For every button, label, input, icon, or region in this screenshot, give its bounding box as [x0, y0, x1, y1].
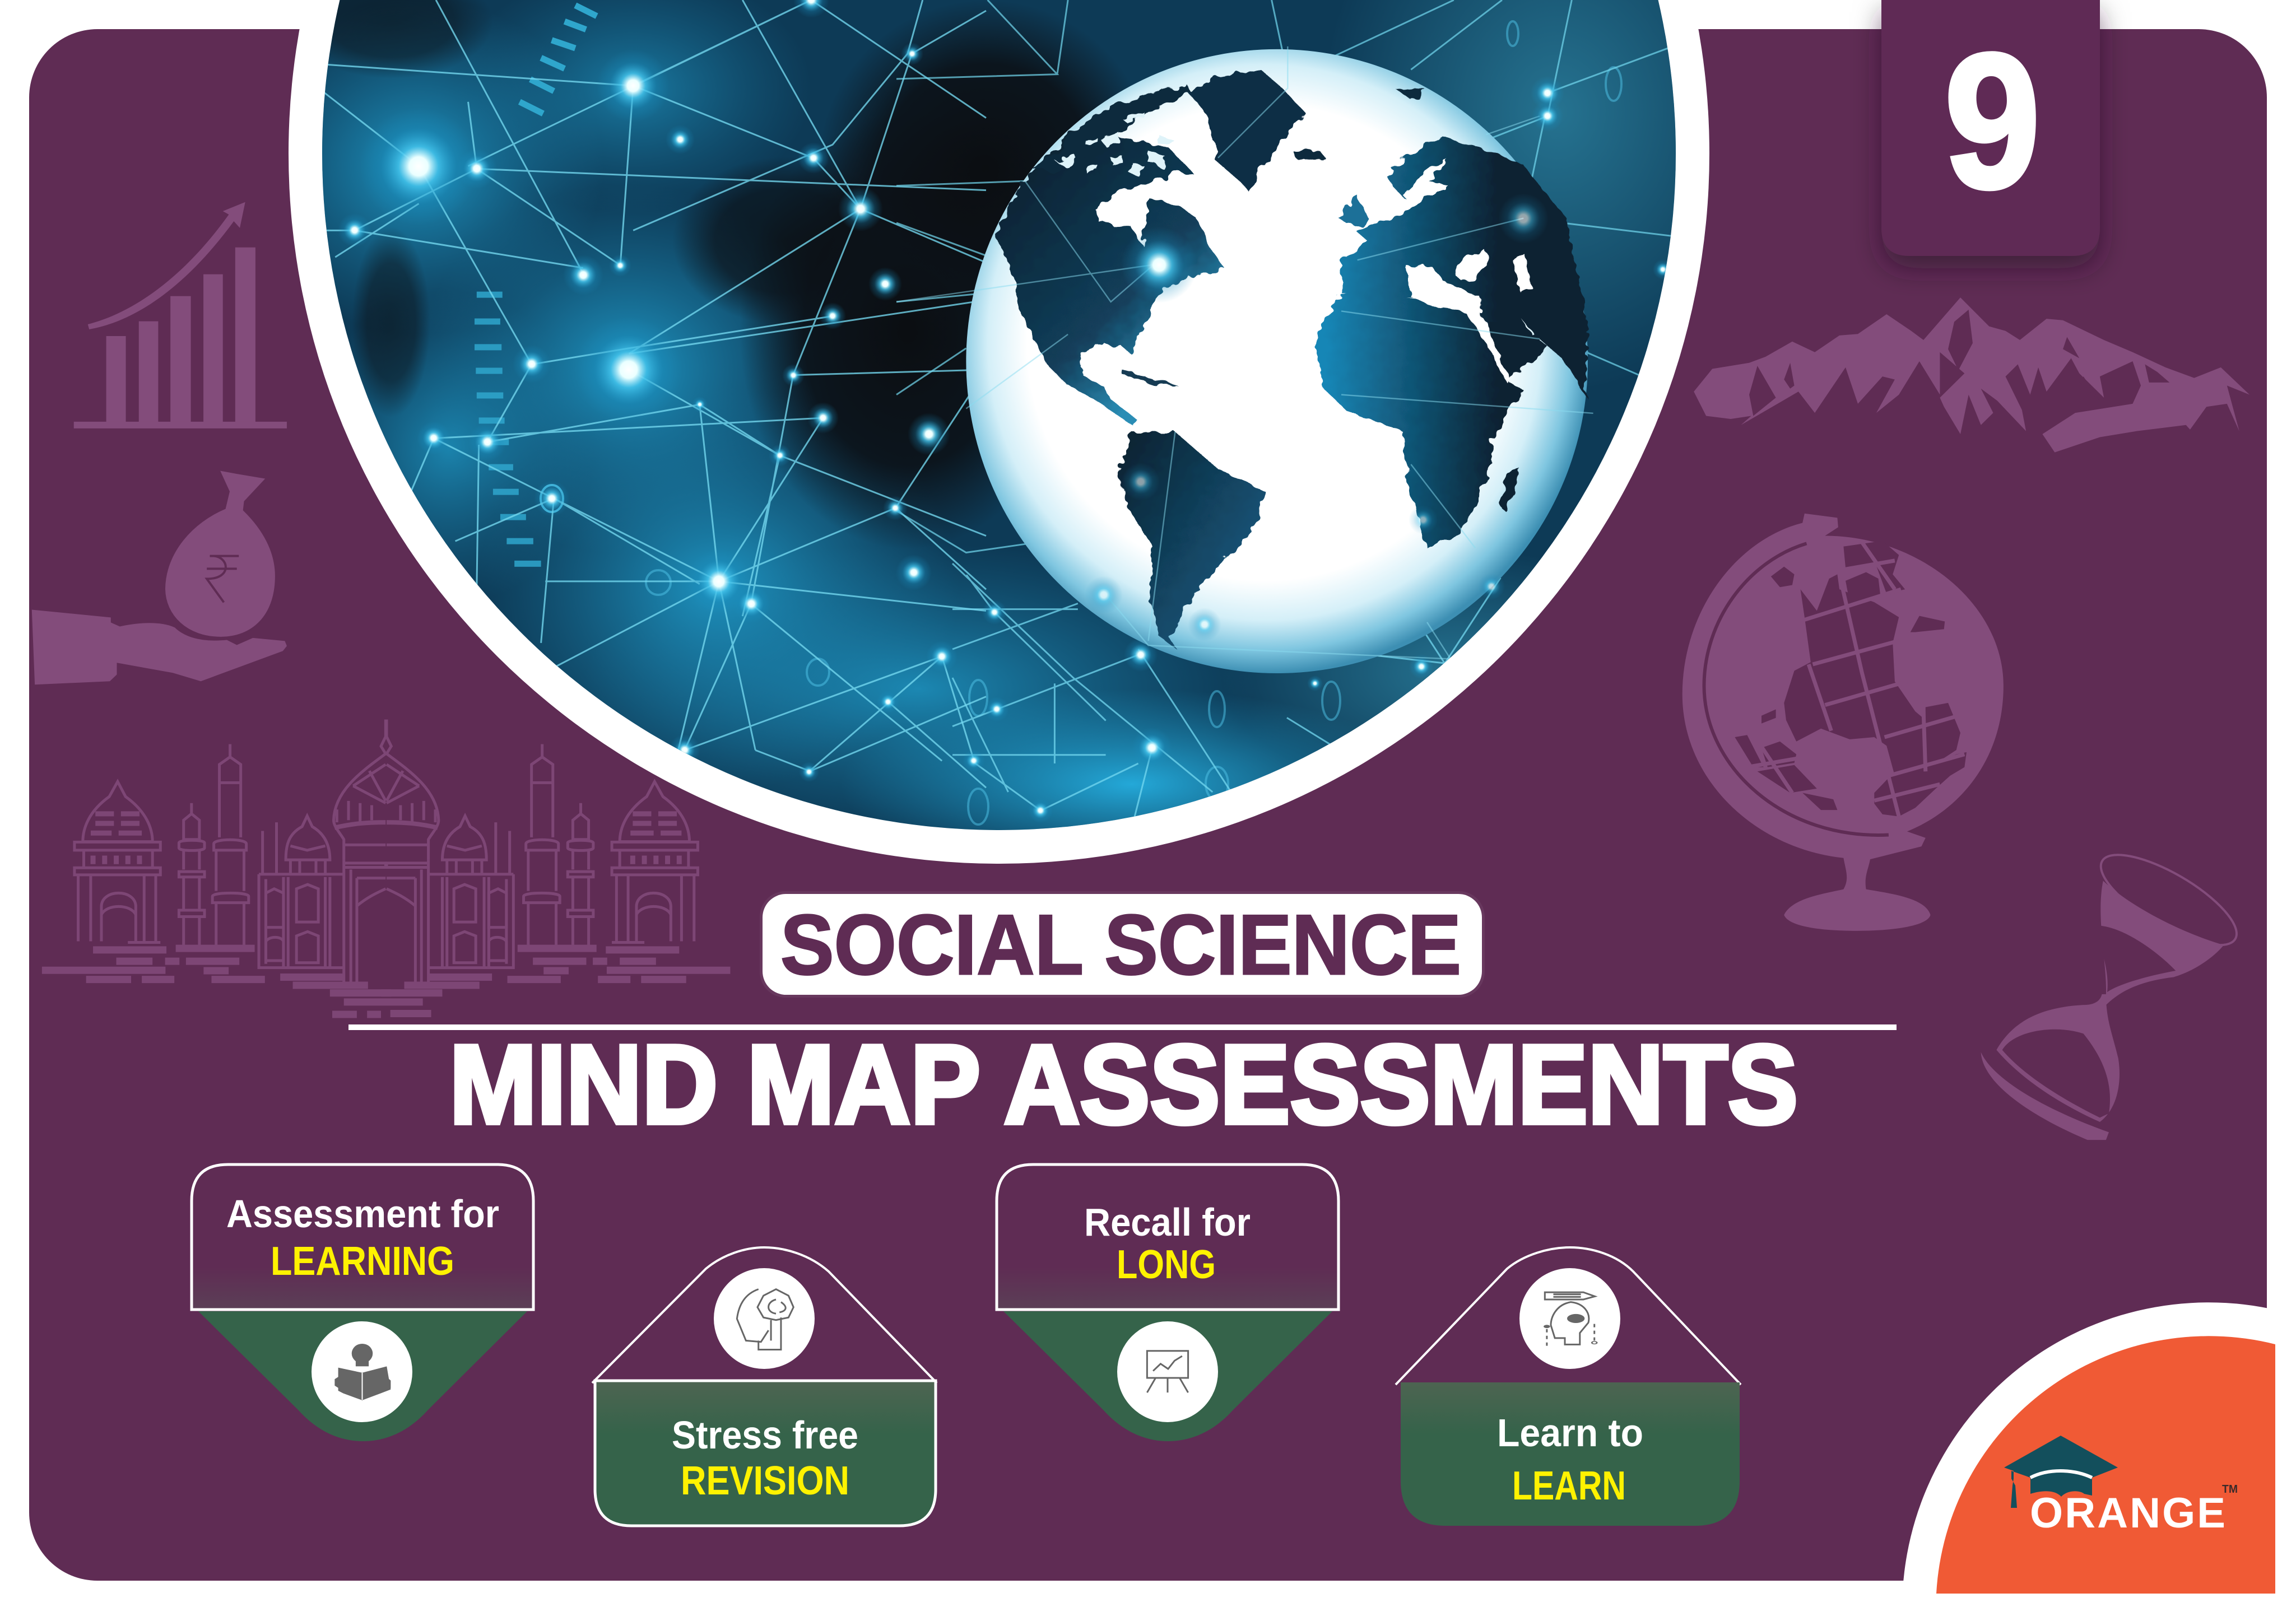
binary rings	[541, 21, 1621, 825]
grade number: 9	[1944, 13, 2041, 228]
card keyword: REVISION	[681, 1459, 849, 1503]
trademark mark: TM	[2222, 1483, 2238, 1496]
logo: graduation cap	[2004, 1436, 2118, 1508]
card keyword: LONG	[1117, 1242, 1216, 1287]
iceland	[1293, 88, 1427, 162]
card heading: Assessment for	[226, 1192, 499, 1236]
globe glints	[1085, 76, 1564, 641]
network lines over globe	[896, 46, 1593, 664]
hero image: network and earth	[322, 0, 1676, 830]
earth globe	[966, 49, 1588, 673]
continents	[996, 69, 1588, 648]
glowing nodes	[338, 0, 1673, 823]
white ring around hero	[289, 0, 1709, 864]
icon: presentation board	[1117, 1321, 1218, 1422]
network lines left	[322, 0, 986, 788]
icon: hourglass	[1981, 838, 2248, 1140]
madagascar	[1499, 467, 1518, 511]
icon: head with gear	[714, 1268, 815, 1369]
icon: mountains	[1694, 297, 2249, 453]
icon: desk globe	[1683, 514, 2004, 931]
icon: taj mahal line art	[42, 719, 730, 1014]
orange corner with logo	[1902, 1302, 2296, 1607]
card heading: Stress free	[672, 1413, 858, 1457]
card heading: Recall for	[1084, 1200, 1251, 1244]
main title: MIND MAP ASSESSMENTS	[449, 1022, 1798, 1147]
subject title: SOCIAL SCIENCE	[780, 897, 1461, 993]
gear dashes	[475, 6, 597, 563]
arctic islands	[1030, 83, 1191, 172]
greenland	[1188, 69, 1307, 193]
uk	[1338, 195, 1368, 227]
north america	[996, 125, 1224, 425]
card: assessment for learning	[192, 1165, 533, 1441]
card: stress free revision	[592, 1247, 937, 1526]
card: learn to learn	[1396, 1247, 1741, 1526]
network lines right bottom	[952, 563, 1500, 821]
south america	[1119, 432, 1266, 648]
africa	[1317, 294, 1523, 548]
icon: money bag on hand	[32, 470, 287, 684]
seas	[1403, 160, 1532, 381]
grade tab	[1881, 0, 2100, 256]
card: recall for long	[997, 1165, 1338, 1441]
icon: growth bar chart	[74, 202, 287, 428]
card keyword: LEARN	[1512, 1464, 1626, 1508]
card heading: Learn to	[1497, 1411, 1643, 1455]
icon: head with pencil	[1519, 1268, 1620, 1369]
eurasia	[1341, 137, 1588, 397]
logo wordmark: ORANGE	[2030, 1489, 2225, 1537]
arabia	[1486, 320, 1547, 377]
caribbean	[1122, 369, 1178, 385]
title rule	[348, 1024, 1897, 1030]
network lines right top	[896, 0, 1679, 553]
icon: reader with book	[312, 1321, 412, 1422]
card keyword: LEARNING	[271, 1239, 454, 1284]
subject pill	[760, 891, 1485, 998]
